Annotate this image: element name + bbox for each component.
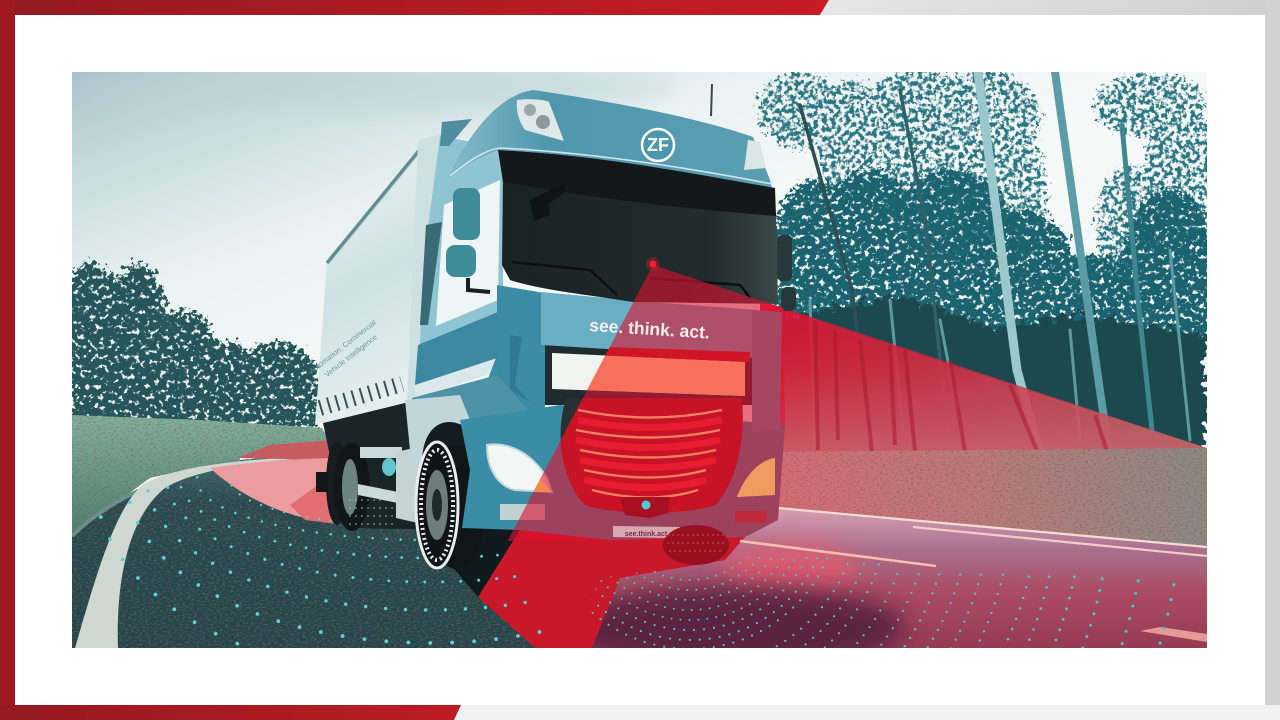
side tank [396,448,418,522]
right fog light tinted [737,458,775,497]
right low lamp tinted [735,511,767,523]
left fog light end tinted [530,470,552,492]
rear red triangle [290,486,334,524]
overlay tint following truck silhouette [470,260,785,541]
roadside field [770,448,1207,547]
left headlamp [517,99,564,141]
slogan text on cab: see. think. act. [589,315,710,343]
grass bank [72,415,335,535]
bumper notch [620,497,670,518]
interior mirror [530,184,566,221]
road lane lines [740,508,1207,566]
upper grille bar tinted [552,353,745,396]
mirror bracket [468,278,490,292]
pink glow on road beside bumper [720,542,860,594]
cab rear deflector [440,119,472,146]
chassis underside [323,402,416,530]
right cab pillar [752,310,782,432]
cab side upper [417,136,503,392]
number plate: see.think.act [625,531,668,538]
right forest dense canopy [770,166,1207,339]
red beam base haze on forest floor [780,357,1207,452]
left road edge shoulder line [72,460,240,536]
sensor dots left of truck [98,460,542,646]
ZF logo [642,129,674,161]
number plate [613,526,680,538]
right fog light [737,458,775,497]
rear red glow on road [210,458,338,524]
number plate re-tinted: see.think.act [625,531,668,538]
teal sensor light on bumper [642,500,650,510]
right low lamp [735,511,767,523]
frame: top grey bar [820,0,1280,15]
photo: truck on forest road [58,66,1220,680]
cab door lower panel [415,312,498,385]
grille bars in orange [576,410,722,498]
beam overlay on truck [470,260,785,565]
red beam over forest [760,304,1207,452]
road left of truck [72,450,540,648]
right forest dark understory [770,295,1207,455]
sun visor [498,150,776,216]
right headlamp [744,140,766,170]
left upper mirror [453,188,480,240]
front wheel [416,442,486,569]
wiper arms [512,262,750,298]
rear wheels [326,441,370,531]
sky [72,72,1207,472]
cab front lower dark gap [545,345,760,405]
chassis steps [358,447,402,503]
grille dark slats [576,420,722,488]
cab door slit [420,222,442,325]
mud flap hitch [316,472,326,492]
grille [561,398,743,512]
rear red glow on grass [237,440,333,460]
right forest sparse crowns [758,70,1216,285]
frame: bottom pale bar [454,705,1280,720]
teal glow on chassis [382,458,396,476]
trailer bottom straps [320,384,402,408]
white road edge band [75,458,294,648]
trailer roof rail [327,147,423,265]
truck [307,84,796,569]
windshield [502,178,778,304]
maroon road patch [592,570,914,648]
red sensor dot [646,257,660,271]
right lower mirror [781,287,796,311]
right upper mirror [777,235,792,281]
trailer lettering: Vehicle Intelligence [323,332,379,379]
white upper grille bar [552,353,745,396]
frame: right grey bar [1265,0,1280,720]
trailer side [315,176,416,425]
cab roof [447,90,775,200]
ZF logo: ZF [647,135,669,155]
cab door sill [415,358,497,398]
cab door window [436,180,500,326]
left fog light [487,444,552,492]
cloud shading at top of sky [340,72,668,110]
road right of truck [592,509,1207,648]
forest trunks [800,72,1190,460]
sensor dots right of truck [591,552,1176,648]
front corner panel [480,285,545,412]
cab lower side [412,375,530,445]
trailer lettering: Automation. Commercial [307,318,378,376]
corner air intake [510,335,530,402]
roof lower highlight [450,148,772,184]
red pool of light on road [478,530,745,648]
frame: top red bar [0,0,829,15]
left lower mirror [446,245,476,277]
front right wheel shadow [663,525,729,565]
left tree line [58,263,319,430]
number plate re-tinted [613,526,680,538]
wheel arch [405,395,482,470]
trailer rear post [407,134,441,403]
dark shadow under truck [454,528,520,597]
rear tyre tread pattern [350,500,398,524]
dark red tree trunks inside beam [815,320,1110,460]
frame: bottom red bar [0,705,461,720]
front bumper body [460,405,785,540]
roof antenna [711,84,712,116]
dark red band above grille [548,345,750,362]
cab front panel [541,292,757,358]
saturated grille [561,398,743,512]
right wheel tread dots [668,535,725,551]
wheel arch dark [422,422,482,470]
frame: left red bar [0,0,15,720]
left low lamp [500,504,545,520]
road arrow marking [1140,627,1207,642]
